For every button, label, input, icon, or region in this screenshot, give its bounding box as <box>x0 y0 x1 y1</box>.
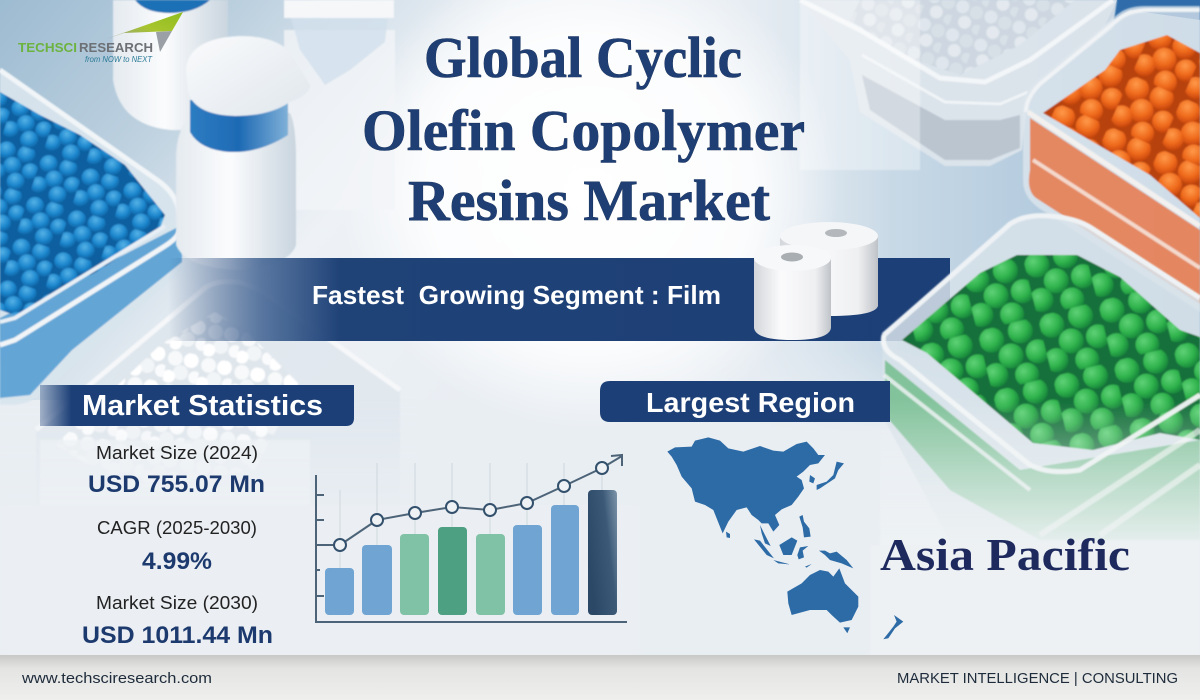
heading: market statistics <box>40 385 354 426</box>
heading: largest region: Largest Region <box>646 387 855 418</box>
region name: Asia Pacific <box>880 529 1130 580</box>
photo: green pellet tray <box>870 214 1200 655</box>
map: Asia Pacific <box>667 437 903 639</box>
title: Resins Market <box>408 168 771 233</box>
logo: TechSci Research <box>18 12 183 64</box>
banner: fastest growing segment: Fastest Growing Segment : Film <box>312 280 721 310</box>
footer bar: MARKET INTELLIGENCE | CONSULTING <box>897 670 1178 687</box>
market statistics values: 4.99% <box>142 548 212 575</box>
market statistics values: USD 1011.44 Mn <box>82 622 273 649</box>
banner: fastest growing segment <box>168 258 950 341</box>
logo: TechSci Research: TECHSCI <box>18 40 77 55</box>
footer bar: www.techsciresearch.com <box>21 670 212 687</box>
photo: white plastic bottles <box>113 0 395 270</box>
photo: clear pellet tray, top right <box>800 0 1117 170</box>
photo: orange pellet tray <box>1023 6 1200 312</box>
title: Global Cyclic <box>424 25 742 90</box>
icon: film rolls <box>754 222 878 340</box>
logo: TechSci Research: from NOW to NEXT <box>85 55 153 64</box>
market statistics values: Market Size (2030) <box>96 593 258 613</box>
title <box>362 25 805 233</box>
title: Olefin Copolymer <box>362 98 805 163</box>
market statistics values: USD 755.07 Mn <box>88 471 265 498</box>
photo: blue pellet tray <box>0 68 183 405</box>
heading: market statistics: Market Statistics <box>82 390 323 422</box>
heading: largest region <box>600 381 890 422</box>
market statistics values <box>82 443 273 649</box>
chart: bars with growth line <box>316 455 627 622</box>
market statistics values: CAGR (2025-2030) <box>97 518 257 538</box>
market statistics values: Market Size (2024) <box>96 443 258 463</box>
logo: TechSci Research: RESEARCH <box>79 40 153 55</box>
photo: white pellet tray, lower left <box>0 282 640 660</box>
footer bar <box>0 655 1200 700</box>
